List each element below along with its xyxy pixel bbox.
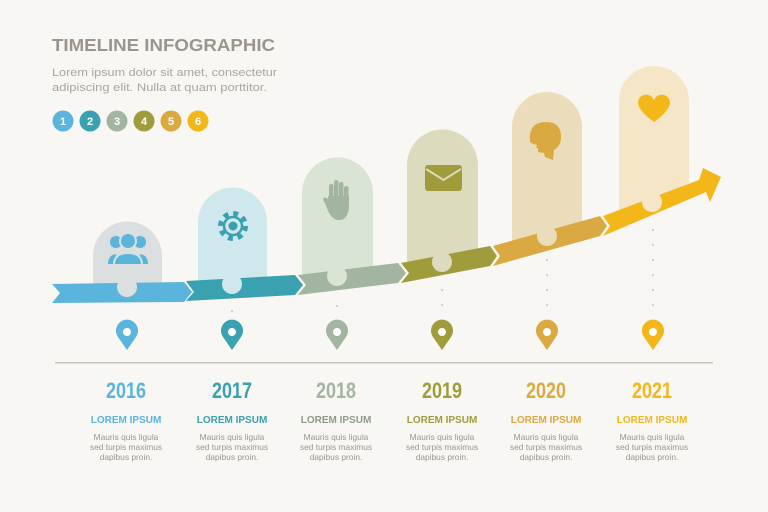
icon: envelope — [425, 165, 462, 191]
years: 2020 — [526, 378, 566, 403]
title: TIMELINE INFOGRAPHIC — [52, 35, 275, 55]
headings: LOREM IPSUM — [91, 415, 161, 426]
legend: numbered circles: 3 — [114, 116, 120, 128]
subtitle text — [52, 67, 277, 94]
icon: heart — [638, 95, 670, 122]
body texts: sed turpis maximus — [300, 442, 372, 452]
body texts: Mauris quis ligula — [94, 432, 159, 442]
years: 2017 — [212, 378, 252, 403]
icon: hand — [323, 180, 349, 220]
body texts: dapibus proin. — [416, 452, 468, 462]
body texts — [90, 432, 688, 462]
headings: LOREM IPSUM — [301, 415, 371, 426]
legend: numbered circles: 4 — [141, 116, 148, 128]
icon: head — [530, 122, 561, 160]
legend: numbered circles: 2 — [87, 116, 93, 128]
body texts: Mauris quis ligula — [200, 432, 265, 442]
dotted connectors — [231, 229, 654, 312]
body texts: dapibus proin. — [310, 452, 362, 462]
legend: numbered circles: 6 — [195, 116, 201, 128]
headings: LOREM IPSUM — [511, 415, 581, 426]
icon: people — [108, 233, 148, 265]
body texts: sed turpis maximus — [90, 442, 162, 452]
subtitle text: adipiscing elit. Nulla at quam porttitor. — [52, 82, 267, 94]
body texts: dapibus proin. — [626, 452, 678, 462]
body texts: Mauris quis ligula — [410, 432, 475, 442]
years: 2021 — [632, 378, 672, 403]
body texts: sed turpis maximus — [510, 442, 582, 452]
pins — [116, 320, 664, 350]
body texts: dapibus proin. — [520, 452, 572, 462]
pills — [93, 66, 689, 285]
subtitle text: Lorem ipsum dolor sit amet, consectetur — [52, 67, 277, 79]
body texts: dapibus proin. — [100, 452, 152, 462]
headings: LOREM IPSUM — [617, 415, 687, 426]
bulbs — [117, 192, 662, 297]
body texts: Mauris quis ligula — [620, 432, 685, 442]
legend: numbered circles: 1 — [60, 116, 66, 128]
body texts: Mauris quis ligula — [514, 432, 579, 442]
headings — [91, 415, 687, 426]
icon: gear — [221, 214, 245, 238]
arrow band — [52, 168, 721, 303]
legend: numbered circles — [52, 110, 208, 132]
headings: LOREM IPSUM — [407, 415, 477, 426]
body texts: dapibus proin. — [206, 452, 258, 462]
years — [106, 378, 672, 403]
body texts: sed turpis maximus — [616, 442, 688, 452]
baseline — [55, 362, 713, 364]
body texts: sed turpis maximus — [406, 442, 478, 452]
body texts: sed turpis maximus — [196, 442, 268, 452]
body texts: Mauris quis ligula — [304, 432, 369, 442]
headings: LOREM IPSUM — [197, 415, 267, 426]
legend: numbered circles: 5 — [168, 116, 174, 128]
years: 2019 — [422, 378, 462, 403]
years: 2018 — [316, 378, 356, 403]
years: 2016 — [106, 378, 146, 403]
